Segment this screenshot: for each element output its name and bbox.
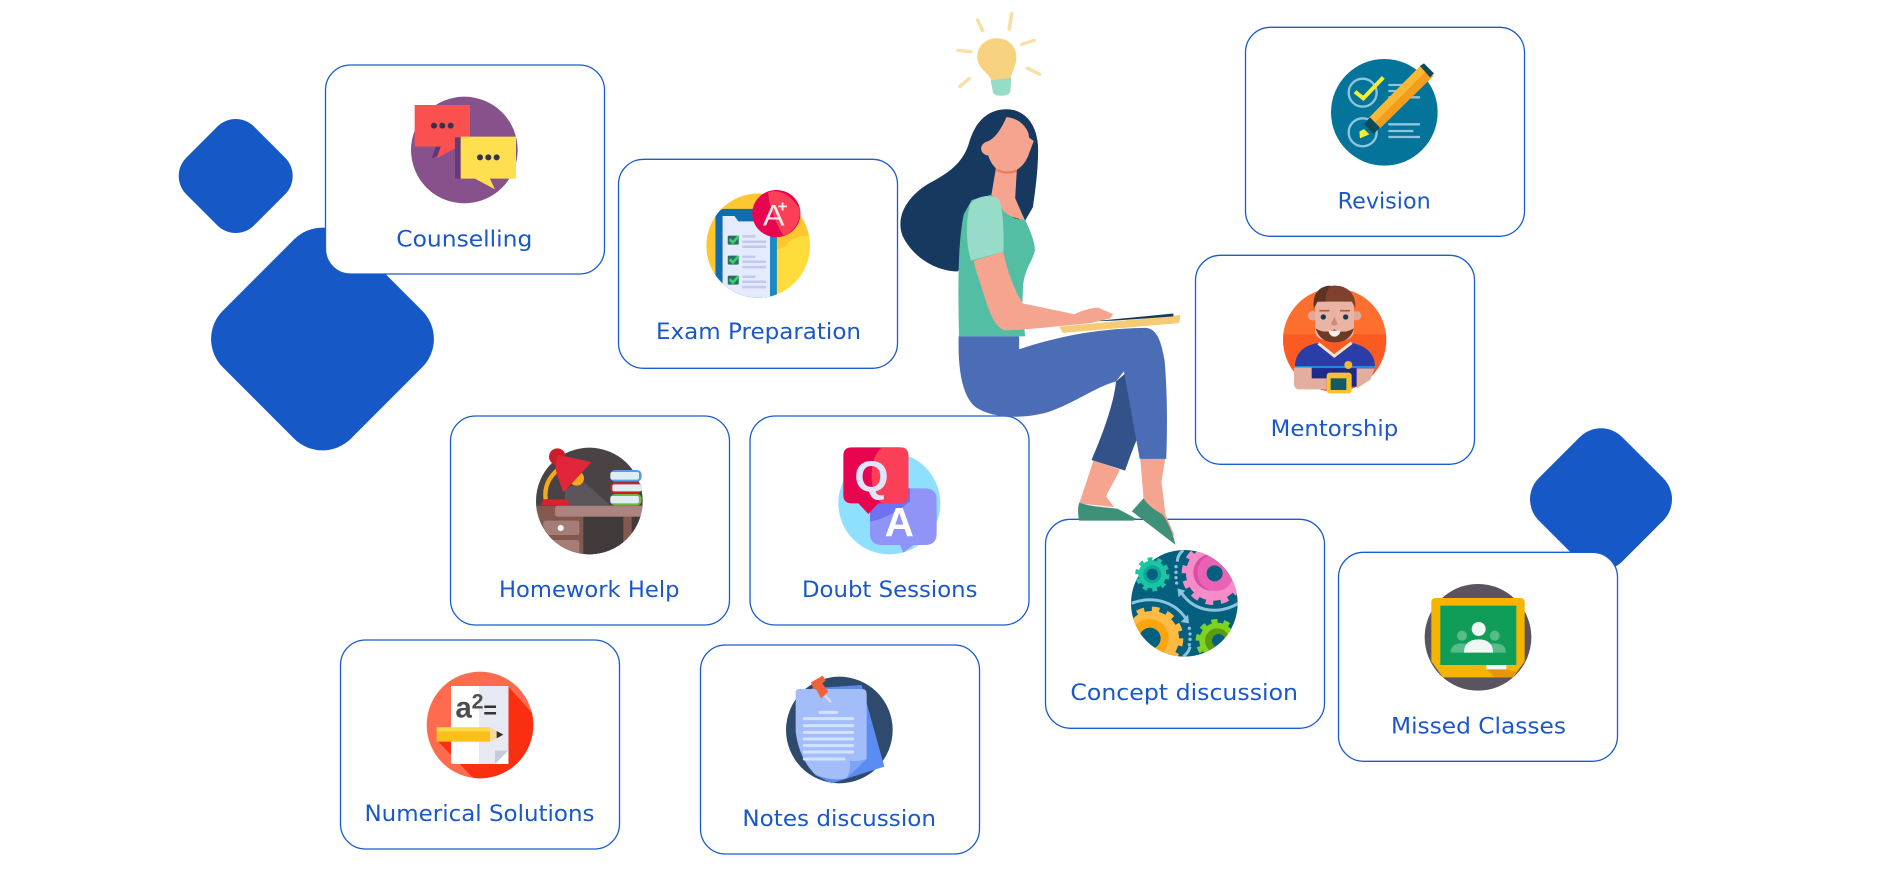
label: Mentorship (1271, 417, 1398, 442)
label: Notes discussion (742, 807, 936, 832)
background diamond: large left (195, 211, 450, 467)
label: Concept discussion (1070, 681, 1298, 706)
icon: light bulb (958, 14, 1040, 96)
icon: Q and A bubbles: A (885, 499, 914, 545)
label: Doubt Sessions (802, 578, 978, 603)
icon: desk with lamp and books (535, 448, 645, 560)
label: Counselling (396, 228, 532, 252)
card: Concept discussion (1046, 519, 1324, 728)
card: Numerical Solutions (340, 640, 620, 849)
icon: coach with stopwatch (1283, 286, 1386, 393)
background diamond: small left (168, 108, 303, 244)
illustration: woman sitting with laptop (900, 14, 1180, 545)
icon: Q and A bubbles (838, 447, 940, 554)
card: Doubt Sessions (750, 416, 1029, 625)
icon: math paper and pencil: 2 (472, 689, 484, 713)
card: Counselling (326, 65, 604, 274)
icon: math paper and pencil: a (455, 691, 472, 724)
icon: Q and A bubbles: Q (854, 452, 889, 501)
icon: math paper and pencil (427, 672, 538, 783)
icon: speech bubbles (411, 97, 518, 203)
card: Missed Classes (1338, 552, 1618, 761)
label: Exam Preparation (656, 320, 861, 345)
label: Numerical Solutions (364, 802, 594, 827)
card: Revision (1246, 27, 1524, 236)
background diamond: right (1518, 416, 1684, 583)
icon: pinned notes (786, 676, 893, 783)
icon: classroom board (1425, 584, 1531, 691)
label: Missed Classes (1391, 714, 1566, 739)
icon: checklist with A+ badge (706, 190, 810, 300)
card: Mentorship (1196, 255, 1474, 464)
card: Homework Help (450, 416, 730, 625)
icon: math paper and pencil: = (483, 697, 497, 723)
card: Notes discussion (700, 645, 980, 854)
icon: checklist with A+ badge: A (763, 199, 785, 232)
label: Revision (1338, 190, 1431, 214)
card: Exam Preparation (618, 159, 898, 368)
icon: checklist and marker (1331, 59, 1438, 166)
label: Homework Help (499, 578, 680, 603)
icon: gears (1131, 550, 1238, 657)
icon: checklist with A+ badge: + (778, 197, 788, 215)
